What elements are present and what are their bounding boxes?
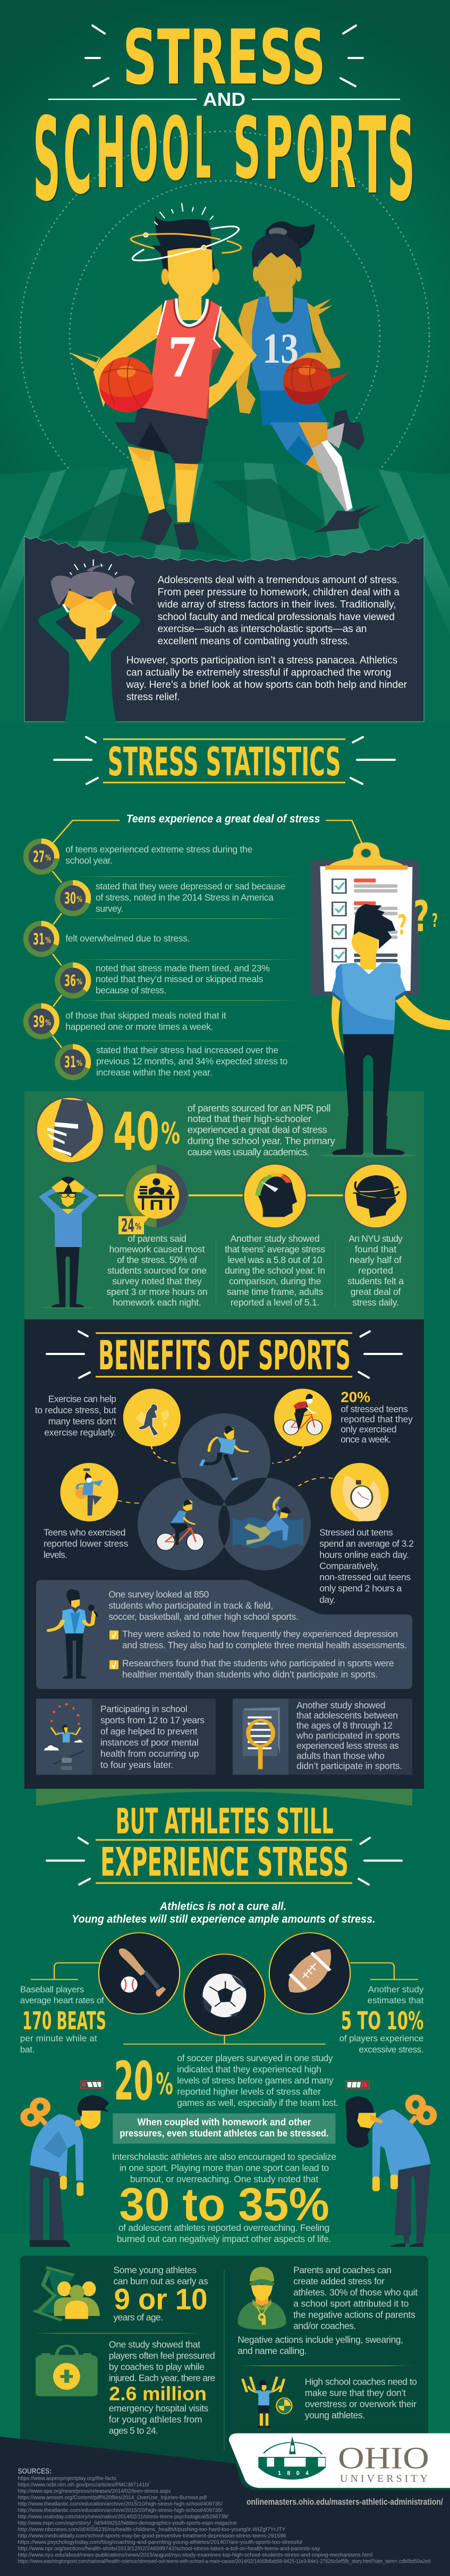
text: high school coaches: High school coaches need to	[305, 2377, 417, 2387]
dizzy rings and burst above boy	[131, 204, 241, 261]
text: 40 percent: noted that their high-schooler	[188, 1113, 311, 1124]
intro text: However, sports participation isn’t a stress panacea. Athletics	[126, 655, 397, 666]
logo seal year: 1804	[278, 2470, 309, 2477]
text: soccer players: levels of stress before games and many	[177, 2075, 334, 2086]
tag: 24 percent: 24	[121, 1215, 134, 1236]
stat: excessive stress: excessive stress.	[359, 2044, 423, 2054]
intro text: Adolescents deal with a tremendous amount of stress.	[158, 575, 400, 586]
callout: student athletes stressed: pressures, even student athletes can be stressed.	[120, 2127, 329, 2138]
stat text: 39 percent	[65, 1010, 226, 1032]
sources list: http://www.nbcnews.com/id/4556235/ns/health-childrens_health/t/pushing-too-hard-too-young/#.WIZgf7YrJTY	[18, 2526, 286, 2532]
text: another study: didn’t participate in sports.	[296, 1761, 402, 1771]
icon: medical kit	[36, 2346, 98, 2396]
connector lines for stat chain	[53, 821, 365, 1048]
icon: stack of books	[36, 1097, 104, 1163]
arc under benefits panel	[36, 1789, 412, 1806]
callout: student athletes stressed	[113, 2113, 336, 2144]
intro text: stress relief.	[126, 691, 180, 702]
icon: weightlifter with stopwatch	[243, 2377, 292, 2428]
column text: NYU study: stress daily.	[352, 1297, 399, 1308]
panel: academic stress	[24, 1091, 424, 1319]
text: 40 percent: of parents sourced for an NPR poll	[188, 1102, 330, 1114]
yellow circle: stopwatch in hand	[330, 1463, 389, 1521]
text: overreaching: burned out can negatively impact other aspects of life.	[117, 2234, 331, 2244]
column text: homework: of the stress. 50% of	[117, 1254, 197, 1265]
text: another study: that adolescents between	[296, 1710, 398, 1721]
text: stressed out teens online: non-stressed out teens	[319, 1572, 411, 1583]
title: school sports: O	[129, 98, 158, 202]
stat text: 27 percent: school year.	[65, 855, 113, 866]
stat donut: 27 percent	[26, 841, 57, 872]
stat text: 27 percent	[65, 844, 252, 866]
column text: homework	[106, 1233, 207, 1308]
text: play injured: players often feel pressured	[109, 2350, 215, 2361]
illustration: right slumped athlete with wind-up key	[345, 2081, 434, 2235]
hero: legs and shoes	[115, 422, 380, 549]
text: reduce stress: to reduce stress, but	[35, 1405, 116, 1416]
text: burn out age	[113, 2264, 208, 2323]
panel: benefits of sports	[24, 1319, 424, 1789]
stat: baseball heart rate: bat.	[20, 2044, 35, 2054]
text: 40 percent: during the school year. The primary	[188, 1135, 336, 1147]
logo panel	[229, 2433, 450, 2490]
stat: excessive stress: Another study	[368, 1984, 424, 1994]
text: negative actions: Negative actions include yelling, swearing,	[237, 2335, 403, 2345]
text: participating: health from occurring up	[100, 1748, 199, 1759]
stat donut: 31 percent	[26, 924, 57, 955]
yellow circle: cyclist	[274, 1389, 332, 1446]
text: reduce stress	[35, 1394, 116, 1438]
title: school sports: H	[96, 96, 126, 211]
sources list: https://www.ncbi.nlm.nih.gov/pmc/articles/PMC3871410/	[18, 2481, 149, 2488]
panel: dark green tips	[20, 2256, 428, 2468]
column text: NYU study: An NYU study	[349, 1233, 403, 1244]
intro text: way. Here’s a brief look at how sports can both help and hinder	[126, 680, 407, 690]
stat donut: 31 percent second	[57, 1047, 88, 1077]
icon: magnifying glass over document	[243, 1708, 280, 1769]
intro text: school faculty and medical professionals have viewed	[158, 612, 395, 623]
stat text: 30 percent: survey.	[96, 903, 123, 914]
heading: but athletes still experience stress	[47, 1801, 402, 1885]
question marks: ?	[432, 910, 438, 932]
bullet text two: Researchers found that the students who participated in sports were	[122, 1658, 394, 1668]
text: stressed out teens online: spend an average of 3.2	[319, 1538, 414, 1549]
question marks: ?	[397, 909, 407, 941]
icon: juggling balancer	[44, 1703, 84, 1770]
text: play injured: by coaches to play while	[109, 2361, 205, 2372]
venn diagram	[138, 1414, 311, 1570]
big stat: 20 percent soccer: 20	[114, 2050, 154, 2112]
jersey number 13: 13	[262, 325, 299, 372]
hero: boy basketball player upper body	[69, 216, 257, 425]
icon: hourglass and people	[34, 2267, 100, 2320]
bullet text two	[122, 1658, 394, 1679]
dividers between stats	[78, 876, 296, 1041]
title: school sports: T	[359, 94, 386, 218]
text: parents and coaches: the negative actions of parents	[293, 2309, 415, 2320]
text: stressed out teens online	[319, 1527, 414, 1605]
logo wordmark: Ohio: OHIO	[338, 2441, 429, 2475]
title: school sports: R	[328, 96, 356, 211]
venn figure: runner	[201, 1425, 248, 1480]
title: school sports: O	[162, 98, 190, 200]
title: school sports: S	[33, 93, 61, 227]
column text: stress level: Another study showed	[231, 1233, 320, 1244]
title: school sports: S	[233, 98, 261, 198]
illustration: student with clipboard	[332, 904, 450, 1119]
venn figure: swimmer	[233, 1497, 303, 1549]
text: high school coaches: make sure that they don’t	[305, 2388, 406, 2398]
sources list	[18, 2475, 431, 2564]
stat donut: 30 percent: %	[77, 894, 82, 904]
subheading: athletics is not a cure all	[72, 1901, 376, 1926]
heading: stress statistics	[54, 737, 395, 785]
stat: excessive stress: of players experience	[339, 2033, 423, 2043]
illustration: left slumped athlete with wind-up key	[24, 2081, 109, 2235]
text: survey: students who participated in track & field,	[108, 1600, 273, 1611]
text: participating: sports from 12 to 17 years	[100, 1714, 205, 1725]
text: specialize: Interscholastic athletes are also encouraged to specialize	[112, 2152, 336, 2162]
text: specialize	[112, 2152, 336, 2185]
text: negative actions	[237, 2335, 403, 2356]
bullet text one	[122, 1628, 407, 1650]
column text: NYU study: reported	[358, 1265, 393, 1276]
text: participating	[100, 1703, 205, 1770]
column text: NYU study: nearly half of	[350, 1254, 402, 1265]
connectors to sports icons	[31, 1963, 418, 2044]
column text: NYU study: found that	[355, 1244, 396, 1254]
text: burn out age: can burn out as early as	[113, 2276, 208, 2286]
stat text: 36 percent: noted that stress made them tired, and 23%	[96, 963, 270, 973]
text: another study: the ages of 8 through 12	[296, 1720, 393, 1731]
stat text: 30 percent	[96, 881, 286, 914]
title: and: AND	[203, 89, 245, 110]
title: school sports: O	[296, 98, 325, 203]
basketball: girl	[283, 358, 350, 405]
text: parents and coaches: a school sport attributed it to	[293, 2298, 409, 2309]
stat text: 27 percent: of teens experienced extreme stress during the	[65, 844, 252, 855]
text: participating: to four years later.	[100, 1759, 173, 1770]
card: another study	[233, 1699, 412, 1775]
dashed connectors	[118, 1446, 333, 1503]
icon: homework donut	[125, 1165, 188, 1227]
stat: 20 percent of stressed teens: once a week.	[341, 1434, 391, 1445]
text: parents and coaches: create added stress for	[293, 2276, 385, 2286]
text: stressed out teens online: Stressed out teens	[319, 1527, 393, 1538]
stat donut: 31 percent second: 31	[64, 1053, 76, 1071]
hero: girl basketball player upper body	[236, 221, 351, 425]
stat: baseball heart rate	[20, 1984, 106, 2054]
intro text: can actually be extremely stressful if approached the wrong	[126, 667, 391, 679]
sources heading: SOURCES:	[18, 2468, 52, 2476]
text: play injured	[109, 2339, 215, 2436]
stat text: 36 percent: because of stress.	[96, 985, 166, 996]
text: another study: who participated in sports	[296, 1730, 400, 1741]
footer dark slab	[0, 2437, 450, 2576]
text: teens who exercised: levels.	[44, 1550, 67, 1560]
title: school sports: L	[194, 98, 220, 198]
bullet text one: They were asked to note how frequently they experienced depression	[122, 1628, 398, 1639]
connector bars	[98, 1194, 343, 1197]
text: another study	[296, 1700, 402, 1771]
illustration: student legs and shadow	[320, 1116, 417, 1157]
sources list: http://www.npr.org/sections/health-shots/2013/12/02/246599742/school-stress-takes-a-toll-on-health-teens-and-parents-say	[18, 2545, 320, 2552]
column text: stress level: level was a 5.8 out of 10	[228, 1254, 322, 1265]
stat donut: 36 percent: 36	[64, 972, 76, 990]
jersey number 7: 7	[168, 324, 197, 390]
basketball: boy	[99, 357, 154, 413]
intro text: excellent means of combating youth stress.	[158, 636, 350, 647]
stat text: 31 percent second: increase within the next year.	[96, 1067, 213, 1077]
subheading: teens experience: Teens experience a great deal of stress	[126, 813, 320, 825]
panel: introduction	[24, 536, 424, 722]
venn figure: cyclist	[156, 1499, 204, 1550]
big stat: 40 percent: 40	[113, 1102, 159, 1162]
bullet text two: healthier mentally than students who didn’t participate in sports.	[122, 1669, 378, 1679]
text: survey	[108, 1589, 299, 1622]
stat text: 31 percent second	[96, 1045, 287, 1077]
text: play injured: One study showed that	[109, 2339, 200, 2349]
column text: stress level: that teens’ average stress	[225, 1244, 325, 1254]
stat text: 39 percent: of those that skipped meals noted that it	[65, 1010, 226, 1021]
illustration: man holding head	[39, 1177, 98, 1309]
checkbox bullet one	[109, 1630, 118, 1640]
text: soccer players	[177, 2053, 338, 2108]
text: 40 percent: experienced a great deal of stress	[188, 1124, 327, 1135]
feet of slumped athletes	[30, 2222, 425, 2247]
stat donut: 36 percent: %	[77, 977, 82, 986]
stat text: 30 percent: of stress, noted in the 2014 Stress in America	[96, 892, 274, 903]
stat text: 30 percent: stated that they were depressed or sad because	[96, 881, 286, 891]
stat text: 31 percent second: stated that their stress had increased over the	[96, 1045, 278, 1056]
column text: homework: homework each night.	[113, 1297, 201, 1308]
text: teens who exercised: Teens who exercised	[44, 1527, 125, 1538]
stat donut: 31 percent: 31	[33, 930, 45, 948]
text: survey: One survey looked at 850	[108, 1589, 209, 1600]
text: play injured: 2.6 million	[109, 2383, 207, 2405]
yellow circle: athlete with battery	[60, 1463, 118, 1521]
intro text: From peer pressure to homework, children deal with a	[158, 587, 400, 598]
column text: homework: survey noted that they	[112, 1276, 202, 1286]
text: stressed out teens online: hours online each day.	[319, 1550, 409, 1560]
text: reduce stress: exercise regularly.	[44, 1427, 116, 1438]
big stat: 20 percent soccer: %	[156, 2067, 173, 2101]
text: stressed out teens online: Comparatively,	[319, 1561, 379, 1571]
sources list: http://www.nyu.edu/about/news-publications/news/2015/august/nyu-study-examines-top-high-school-students-stress-and-coping-mechanisms.html	[18, 2552, 372, 2558]
text: overreaching: of adolescent athletes reported overreaching. Feeling	[118, 2222, 329, 2233]
text: stressed out teens online: day.	[319, 1594, 336, 1605]
subheading: athletics is not a cure all: Young athletes will still experience ample amounts of stress.	[72, 1913, 376, 1926]
text: reduce stress: many teens don’t	[48, 1416, 116, 1427]
sources list: http://www.espn.com/espn/story/_/id/9469252/hidden-demographics-youth-sports-espn-magazine	[18, 2520, 237, 2526]
illustration: person with microphone	[49, 1589, 98, 1679]
text: specialize: burnout, or overreaching. One study noted that	[130, 2174, 318, 2185]
text: another study: Another study showed	[296, 1700, 386, 1711]
text: soccer players: reported higher levels of stress after	[177, 2086, 321, 2097]
title rules and burst strokes	[48, 26, 400, 100]
sources list: http://www.theatlantic.com/education/archive/2015/10/high-stress-high-school/409735/	[18, 2507, 223, 2513]
title: stress: STRESS	[123, 14, 326, 102]
text: teens who exercised: reported lower stress	[44, 1538, 129, 1549]
stat: excessive stress: estimates that	[368, 1995, 424, 2005]
text: parents and coaches: Parents and coaches can	[293, 2264, 392, 2275]
rounded survey panel	[36, 1580, 412, 1689]
column text: stress level: same time frame, adults	[227, 1286, 324, 1297]
column text: NYU study	[347, 1233, 404, 1308]
stat donut: 39 percent	[26, 1006, 57, 1037]
stat text: 36 percent: noted that they’d missed or skipped meals	[96, 974, 264, 984]
icon: dizzy head	[344, 1164, 407, 1228]
column text: homework: of parents said	[128, 1233, 186, 1244]
text: survey: soccer, basketball, and other high school sports.	[108, 1611, 299, 1622]
text: parents and coaches: athletes. 30% of those who quit	[293, 2287, 418, 2297]
callout: student athletes stressed: When coupled with homework and other	[138, 2116, 311, 2127]
text: another study: experienced less stress as	[296, 1741, 399, 1751]
title: school sports	[33, 93, 415, 227]
intro text	[126, 575, 407, 702]
text: overreaching	[117, 2222, 331, 2244]
bullet text one: and stress. They also had to complete three mental health assessments.	[122, 1640, 407, 1650]
stat: 20 percent of stressed teens: reported that they	[341, 1414, 413, 1425]
sources list: http://www.medicaldaily.com/school-sports-may-be-good-preventive-treatment-depression-stress-teens-291596	[18, 2532, 286, 2539]
text: high school coaches	[305, 2377, 417, 2421]
text: soccer players: games as well, especially if the team lost.	[177, 2097, 338, 2108]
stat donut: 27 percent: %	[45, 853, 51, 863]
text: 40 percent: cause was usually academics.	[188, 1147, 309, 1158]
stat donut: 39 percent: 39	[33, 1013, 45, 1031]
text: parents and coaches	[293, 2264, 418, 2331]
icon: stress gauge head	[243, 1164, 307, 1228]
column text: homework: spent 3 or more hours on	[106, 1286, 207, 1297]
stat donut: 36 percent	[57, 965, 88, 996]
question marks	[397, 892, 438, 941]
yellow circle: runner silhouette	[123, 1389, 181, 1446]
text: play injured: for young athletes from	[109, 2414, 202, 2424]
column text: stress level: comparison, during the	[229, 1276, 321, 1286]
text: play injured: injured. Each year, there are	[109, 2372, 215, 2383]
icon: american football	[269, 1933, 350, 2014]
logo wordmark: University: UNIVERSITY	[340, 2473, 428, 2485]
title: school sports: C	[63, 94, 92, 218]
text: specialize: in one sport. Playing more than one sport can lead to	[120, 2163, 329, 2173]
field with stripes	[0, 463, 450, 723]
intro text: wide array of stress factors in their lives. Traditionally,	[157, 599, 396, 610]
question marks: ?	[413, 892, 429, 941]
text: parents and coaches: and/or coaches.	[293, 2320, 356, 2331]
sources list: http://www.apa.org/news/press/releases/2014/02/teen-stress.aspx	[18, 2488, 171, 2494]
stat donut: 39 percent: %	[45, 1018, 51, 1027]
dotted circles behind hero	[20, 131, 429, 541]
big stat: 40 percent: %	[161, 1116, 180, 1150]
text: participating: Participating in school	[100, 1703, 188, 1714]
sources list: https://www.psychologytoday.com/blog/coaching-and-parenting-young-athletes/201407/are-youth-sports-too-stressful	[18, 2539, 302, 2545]
text: high school coaches: young athletes.	[305, 2410, 365, 2421]
title: school sports: P	[265, 99, 293, 199]
stat: baseball heart rate: 170 BEATS	[22, 2006, 106, 2035]
text: soccer players: of soccer players surveyed in one study	[177, 2053, 333, 2063]
sources list: http://www.usatoday.com/story/news/nation/2014/02/11/stress-teens-psychological/5266739/	[18, 2513, 228, 2520]
text: another study: adults than those who	[296, 1751, 385, 1761]
card: participating in school sports	[36, 1699, 216, 1775]
panel dividers	[35, 2270, 413, 2450]
stat: 20 percent of stressed teens: only exercised	[341, 1424, 397, 1435]
text: participating: of age helped to prevent	[100, 1726, 198, 1736]
stat text: 31 percent: felt overwhelmed due to stress.	[65, 933, 190, 943]
stat: 20 percent of stressed teens: 20%	[341, 1389, 370, 1406]
stat: 20 percent of stressed teens	[341, 1389, 413, 1445]
text: high school coaches: overstress or overwork their	[305, 2399, 417, 2410]
icon: clipboard	[311, 842, 419, 996]
text: burn out age: Some young athletes	[113, 2264, 197, 2275]
column text: stress level: reported a level of 5.1.	[231, 1297, 319, 1308]
stat text: 31 percent second: previous 12 months, and 34% expected stress to	[96, 1056, 287, 1067]
stat donut: 31 percent second: %	[77, 1058, 82, 1068]
intro text: exercise—such as interscholastic sports—as an	[158, 624, 367, 635]
text: reduce stress: Exercise can help	[48, 1394, 116, 1404]
stat: baseball heart rate: Baseball players	[20, 1984, 84, 1994]
icon: baseball bat and ball	[99, 1933, 180, 2014]
text: negative actions: and name calling.	[237, 2346, 307, 2356]
text: stressed out teens online: only spend 2 hours a	[319, 1583, 402, 1594]
icon: stressed girl covering eyes	[38, 559, 140, 722]
text: soccer players: indicated that they experienced high	[177, 2064, 321, 2075]
text: teens who exercised	[44, 1527, 129, 1560]
text: burn out age: 9 or 10	[114, 2282, 207, 2316]
icon: coach with whistle	[237, 2267, 286, 2330]
column text: NYU study: great deal of	[351, 1286, 401, 1297]
stat text: 36 percent	[96, 963, 270, 996]
sources list: https://www.aspenprojectplay.org/the-facts	[18, 2475, 116, 2481]
dividers between columns	[216, 1239, 335, 1307]
sources list: https://www.amssm.org/Content/pdf%20files/2014_OverUse_Injuries-Burnout.pdf	[18, 2494, 207, 2500]
stat: excessive stress	[339, 1984, 424, 2054]
stat donut: 30 percent	[57, 883, 88, 914]
stat donut: 27 percent: 27	[33, 848, 45, 866]
icon: soccer ball	[184, 1954, 265, 2035]
sources list: http://www.theatlantic.com/education/archive/2015/10/high-stress-high-school/409735/	[18, 2500, 223, 2507]
stat: baseball heart rate: average heart rates of	[20, 1995, 104, 2005]
text: play injured: emergency hospital visits	[109, 2403, 209, 2413]
stat: 20 percent of stressed teens: of stressed teens	[341, 1404, 408, 1415]
tag: 24 percent: %	[135, 1222, 141, 1232]
column text: NYU study: students felt a	[347, 1276, 404, 1286]
stat donut: 31 percent: %	[45, 935, 51, 945]
stat donut: 30 percent: 30	[64, 889, 76, 907]
column text: homework: homework caused most	[109, 1244, 205, 1254]
column text: homework: students sourced for one	[107, 1265, 207, 1276]
column text: stress level: during the school year. In	[225, 1265, 325, 1276]
subheading: athletics is not a cure all: Athletics is not a cure all.	[159, 1901, 286, 1912]
text: burn out age: years of age.	[113, 2312, 163, 2323]
stat: baseball heart rate: per minute while at	[20, 2033, 97, 2043]
big stat: 30 to 35 percent: 30 to 35%	[119, 2179, 329, 2230]
checkbox bullet two	[109, 1660, 118, 1669]
text: 40 percent	[188, 1102, 336, 1158]
text: participating: instances of poor mental	[100, 1737, 199, 1747]
text: play injured: ages 5 to 24.	[109, 2426, 158, 2436]
stat text: 39 percent: happened one or more times a week.	[65, 1021, 213, 1032]
column text: stress level	[225, 1233, 325, 1308]
